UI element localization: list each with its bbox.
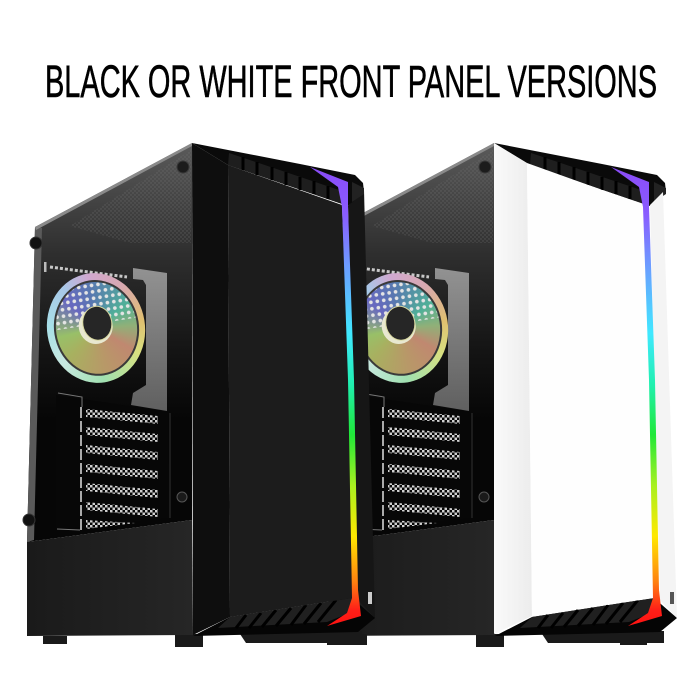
black case feet	[43, 631, 367, 647]
white case side window and interior	[325, 143, 495, 636]
white case feet	[476, 631, 664, 647]
white front panel	[527, 163, 654, 616]
black front panel	[228, 165, 352, 617]
white case RGB fan	[338, 263, 460, 394]
white case RGB light strip	[611, 167, 662, 626]
white right front edge	[650, 192, 677, 618]
black case bottom vents	[193, 598, 375, 636]
white case top vents	[494, 143, 666, 206]
black front panel case	[23, 143, 375, 647]
black case right edge	[348, 190, 375, 618]
white case bottom vents	[495, 598, 677, 636]
white case logo	[670, 592, 674, 604]
black case RGB fan	[35, 263, 157, 394]
black case side window and interior	[23, 143, 193, 636]
white front panel case	[325, 143, 677, 647]
black case logo	[368, 592, 372, 604]
black case RGB light strip	[310, 167, 361, 626]
white front corner strip	[494, 143, 532, 634]
black front corner strip	[192, 143, 230, 635]
black case top vents	[192, 143, 364, 206]
